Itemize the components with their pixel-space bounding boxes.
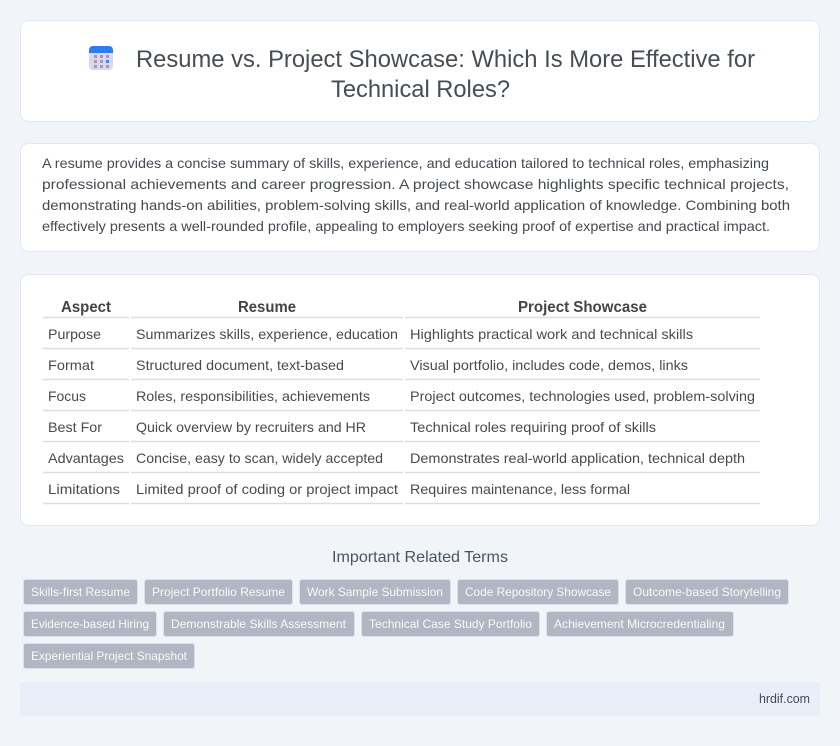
tag: Skills-first Resume [31, 585, 130, 599]
row: Limitations: Limitations [48, 481, 120, 497]
row: Limitations [48, 481, 630, 497]
row: Format: Visual portfolio, includes code, demos, links [410, 357, 688, 373]
row: Format: Format [48, 357, 94, 373]
tag: Project Portfolio Resume [152, 585, 285, 599]
row: Purpose: Highlights practical work and technical skills [410, 326, 693, 342]
row: Focus: Focus [48, 388, 86, 404]
tag: Outcome-based Storytelling [633, 585, 781, 599]
tag [458, 580, 618, 604]
row: Focus: Roles, responsibilities, achievements [136, 388, 370, 404]
tag: Demonstrable Skills Assessment [171, 617, 347, 631]
row: Advantages: Advantages [48, 450, 124, 466]
tag [144, 580, 292, 604]
row: Best For: Best For [48, 419, 102, 435]
tag: Experiential Project Snapshot [31, 649, 188, 663]
tag [164, 612, 354, 636]
table header [61, 299, 647, 316]
tag: Technical Case Study Portfolio [369, 617, 532, 631]
icon: calendar [89, 46, 113, 70]
tag [300, 580, 450, 604]
tag [24, 580, 138, 604]
tag [362, 612, 540, 636]
row: Purpose: Summarizes skills, experience, education [136, 326, 398, 342]
tag [546, 612, 734, 636]
row: Purpose [48, 326, 693, 342]
row: Focus [48, 388, 755, 404]
row: Limitations: Limited proof of coding or project impact [136, 481, 398, 497]
title: Technical Roles? [331, 76, 510, 103]
table header: Resume [238, 299, 296, 316]
row: Purpose: Purpose [48, 326, 101, 342]
row: Best For [48, 419, 656, 435]
tag: Code Repository Showcase [465, 585, 611, 599]
heading: related terms: Important Related Terms [332, 549, 508, 566]
title [136, 46, 755, 103]
title: Resume vs. Project Showcase: Which Is More Effective for [136, 46, 755, 73]
tag: Evidence-based Hiring [31, 617, 149, 631]
row: Format: Structured document, text-based [136, 357, 344, 373]
row: Advantages [48, 450, 745, 466]
row: Best For: Technical roles requiring proof of skills [410, 419, 656, 435]
tag: Achievement Microcredentialing [554, 617, 725, 631]
tag: Work Sample Submission [307, 585, 443, 599]
panel: summary paragraph: A resume provides a concise summary of skills, experience, and education tailored to technical roles, emphasizing [42, 155, 769, 171]
panel: summary paragraph [20, 144, 820, 252]
footer [20, 682, 820, 716]
related term tags [24, 580, 788, 668]
panel: title header [20, 20, 820, 122]
row: Best For: Quick overview by recruiters and HR [136, 419, 366, 435]
tag [24, 644, 194, 668]
table header: Project Showcase [518, 299, 647, 316]
tag [24, 612, 156, 636]
row: Advantages: Concise, easy to scan, widely accepted [136, 450, 383, 466]
panel: summary paragraph: effectively presents a well-rounded profile, appealing to employers seeking proof of expertise and practical impact. [42, 218, 770, 234]
panel: summary paragraph: demonstrating hands-on abilities, problem-solving skills, and real-world application of knowledge. Combining both [42, 197, 790, 213]
row: Focus: Project outcomes, technologies used, problem-solving [410, 388, 755, 404]
panel: comparison table [20, 274, 820, 526]
tag [626, 580, 788, 604]
footer: hrdif.com [759, 691, 810, 706]
panel: summary paragraph: professional achievements and career progression. A project showcase highlights specific technical projects, [42, 176, 789, 192]
row: Advantages: Demonstrates real-world application, technical depth [410, 450, 745, 466]
row: Limitations: Requires maintenance, less formal [410, 481, 630, 497]
row: Format [48, 357, 688, 373]
table header: Aspect [61, 299, 112, 316]
